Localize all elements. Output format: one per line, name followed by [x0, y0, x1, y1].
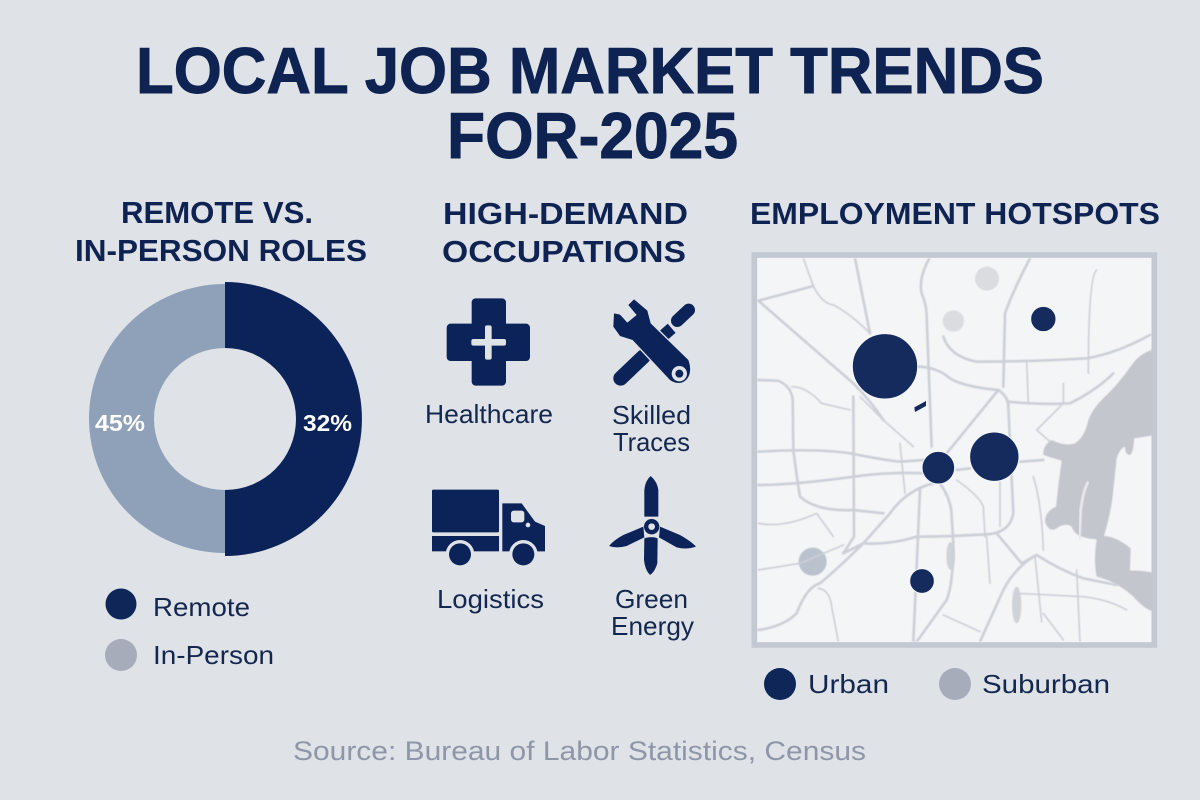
- legend: remote / in-person: In-Person: [153, 640, 274, 670]
- donut chart: 32%: [303, 410, 352, 436]
- donut chart: [89, 282, 362, 556]
- icon: logistics truck: [432, 490, 545, 569]
- icon: wind turbine: [609, 476, 696, 575]
- donut chart: 45%: [95, 410, 145, 436]
- heading: high-demand occupations: [442, 196, 688, 269]
- legend: urban / suburban: Urban: [808, 669, 889, 699]
- map: suburban hotspots: [799, 267, 999, 576]
- map: [754, 255, 1154, 645]
- panel: employment hotspots: [750, 196, 1160, 700]
- legend: urban / suburban: [764, 668, 1110, 700]
- map: urban hotspots: [852, 306, 1056, 593]
- panel: remote vs in-person roles: [75, 195, 367, 671]
- heading: remote vs in-person: REMOTE VS.: [121, 195, 313, 230]
- heading: high-demand occupations: HIGH-DEMAND: [443, 196, 688, 231]
- label: logistics: Logistics: [437, 584, 544, 614]
- map: roads: [758, 258, 1150, 642]
- heading: high-demand occupations: OCCUPATIONS: [442, 234, 686, 269]
- label: skilled traces: [612, 400, 691, 457]
- map: water: [946, 349, 1153, 623]
- title: FOR-2025: [447, 99, 738, 172]
- label: green energy: Green: [615, 584, 688, 614]
- legend: remote / in-person: Remote: [153, 592, 250, 622]
- source note: Source: Bureau of Labor Statistics, Census: [293, 736, 866, 766]
- title: LOCAL JOB MARKET TRENDS: [136, 34, 1044, 107]
- label: skilled traces: Traces: [613, 427, 690, 457]
- label: skilled traces: Skilled: [612, 400, 691, 430]
- label: healthcare: Healthcare: [425, 399, 553, 429]
- label: green energy: [611, 584, 694, 641]
- icon: healthcare cross: [447, 298, 530, 386]
- legend: urban / suburban: Suburban: [982, 669, 1110, 699]
- label: green energy: Energy: [611, 611, 694, 641]
- heading: employment hotspots: EMPLOYMENT HOTSPOTS: [750, 196, 1160, 231]
- title: [136, 34, 1044, 172]
- icon: skilled trades tools: [613, 299, 690, 383]
- panel: high-demand occupations: [425, 196, 696, 641]
- legend: remote / in-person: [105, 588, 274, 671]
- heading: remote vs in-person: [75, 195, 367, 268]
- heading: remote vs in-person: IN-PERSON ROLES: [75, 233, 367, 268]
